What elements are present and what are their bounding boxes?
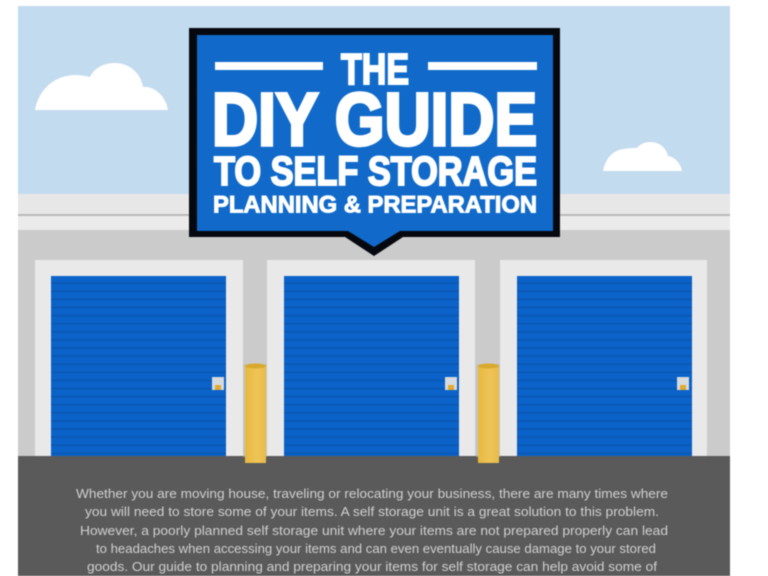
title rule left bbox=[215, 62, 323, 70]
intro paragraph: Whether you are moving house, traveling or relocating your business, there are many times where bbox=[76, 487, 668, 501]
sky background bbox=[18, 6, 730, 195]
padlock 1 bbox=[212, 377, 224, 390]
intro paragraph: you will need to store some of your items. A self storage unit is a great solution to this problem. bbox=[85, 505, 659, 519]
intro paragraph: However, a poorly planned self storage unit where your items are not prepared properly can lead bbox=[80, 524, 668, 538]
title: TO SELF STORAGE: TO SELF STORAGE bbox=[214, 148, 537, 194]
bollard left bbox=[243, 364, 267, 463]
title rule right bbox=[428, 62, 537, 70]
padlock 3 bbox=[677, 377, 689, 390]
intro paragraph: to headaches when accessing your items and can even eventually cause damage to your stored bbox=[96, 542, 656, 556]
bollard right bbox=[476, 364, 500, 463]
intro paragraph: goods. Our guide to planning and preparing your items for self storage can help avoid some of bbox=[87, 560, 658, 574]
cloud right bbox=[603, 142, 682, 171]
sign fill bbox=[197, 35, 553, 247]
title sign bbox=[189, 28, 560, 256]
title: THE: THE bbox=[341, 45, 409, 94]
storage unit door 1 bbox=[35, 260, 243, 457]
dark intro panel bbox=[18, 456, 730, 576]
building wall bbox=[18, 194, 730, 457]
intro paragraph bbox=[76, 487, 668, 574]
cloud left bbox=[35, 63, 168, 110]
sign border and pointer bbox=[189, 28, 560, 256]
title: DIY GUIDE: DIY GUIDE bbox=[212, 78, 537, 161]
title: PLANNING & PREPARATION: PLANNING & PREPARATION bbox=[213, 192, 537, 218]
storage unit door 3 bbox=[500, 260, 707, 457]
storage unit door 2 bbox=[267, 260, 475, 457]
padlock 2 bbox=[445, 377, 457, 390]
